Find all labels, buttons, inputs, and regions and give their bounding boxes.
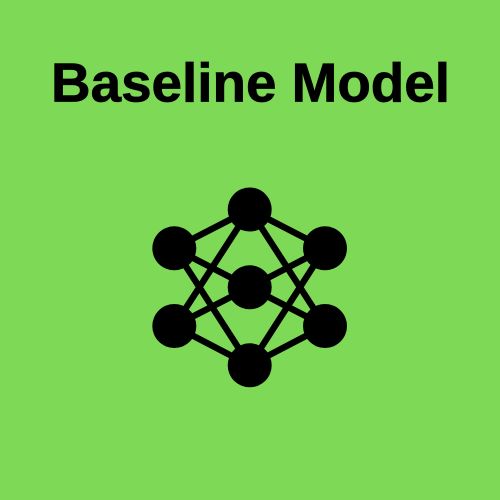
icon: neural network (152, 188, 347, 387)
network nodes (152, 188, 347, 387)
title: Baseline Model (51, 52, 450, 114)
network connections (174, 210, 325, 365)
